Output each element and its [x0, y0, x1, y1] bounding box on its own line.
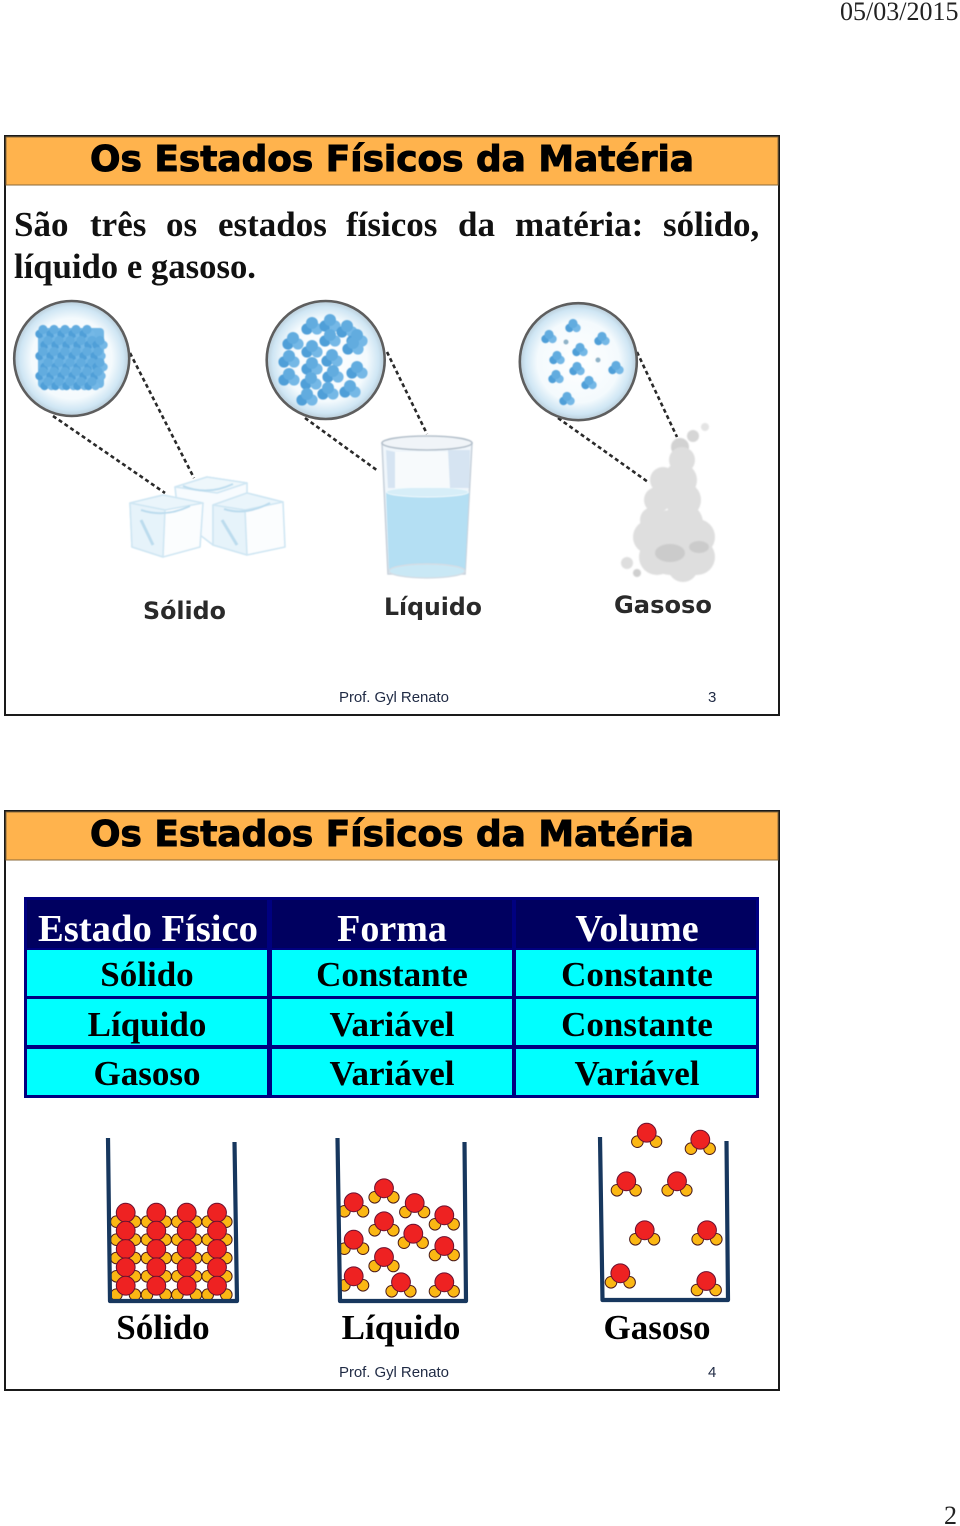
table row: Gasoso: Variável	[574, 1054, 700, 1093]
icon: smoke cloud	[621, 423, 715, 582]
table: properties of the states	[24, 897, 759, 1098]
table header row: Forma	[337, 908, 447, 950]
icon: glass of water	[382, 436, 472, 578]
icon: ice cubes	[130, 477, 285, 557]
table header row: Volume	[575, 908, 699, 950]
table row: Sólido: Constante	[316, 955, 468, 994]
beaker: liquid molecules	[338, 1138, 466, 1301]
intro text: sólido,	[663, 205, 759, 244]
table row: Gasoso: Gasoso	[94, 1054, 200, 1093]
footer: slide number 3: 3	[708, 689, 716, 706]
footer: author, slide 4: Prof. Gyl Renato	[339, 1364, 449, 1381]
diagram: gas state	[520, 303, 715, 619]
table row: Sólido	[27, 950, 756, 996]
slide 4 title: Os Estados Físicos da Matéria	[90, 814, 694, 855]
table row: Líquido: Variável	[329, 1005, 455, 1044]
magnifier: gas particles	[520, 303, 637, 420]
label: Sólido: Sólido	[143, 597, 226, 625]
slide 4 header bar	[6, 812, 778, 860]
panel: slide 3	[5, 136, 779, 715]
label: Gasoso: Gasoso	[614, 591, 712, 619]
intro text	[14, 205, 759, 286]
table row: Líquido	[27, 999, 756, 1045]
slide 3 header bar	[6, 137, 778, 185]
intro text: três	[90, 205, 146, 244]
caption: Sólido: Sólido	[116, 1308, 210, 1347]
intro text: da	[458, 205, 495, 244]
magnifier: solid particles	[14, 301, 129, 416]
diagram: solid state	[14, 301, 285, 625]
intro text: líquido e gasoso.	[14, 247, 256, 286]
diagram: liquid state	[267, 301, 482, 621]
table row: Gasoso: Variável	[329, 1054, 455, 1093]
beaker: solid molecules	[105, 1138, 240, 1307]
intro text: São	[14, 205, 68, 244]
caption: Líquido: Líquido	[342, 1308, 460, 1347]
table header row: Estado Físico	[38, 908, 258, 950]
table row: Líquido: Líquido	[88, 1005, 206, 1044]
intro text: físicos	[346, 205, 437, 244]
beaker: gas molecules	[600, 1123, 728, 1300]
zoom lines: gas	[558, 352, 677, 482]
footer: author, slide 3: Prof. Gyl Renato	[339, 689, 449, 706]
zoom lines: liquid	[305, 352, 427, 471]
intro text: os	[166, 205, 197, 244]
label: Líquido: Líquido	[384, 593, 482, 621]
intro text: estados	[218, 205, 327, 244]
table header row	[27, 900, 756, 950]
table row: Gasoso	[27, 1049, 756, 1095]
table row: Sólido: Constante	[561, 955, 713, 994]
magnifier: liquid particles	[267, 301, 385, 419]
table row: Sólido: Sólido	[100, 955, 194, 994]
zoom lines: solid	[53, 353, 194, 493]
caption: Gasoso: Gasoso	[604, 1308, 710, 1347]
slide 3 title: Os Estados Físicos da Matéria	[90, 139, 694, 180]
intro text: matéria:	[515, 205, 643, 244]
panel: slide 4	[5, 811, 779, 1390]
footer: slide number 4: 4	[708, 1364, 716, 1381]
table row: Líquido: Constante	[561, 1005, 713, 1044]
